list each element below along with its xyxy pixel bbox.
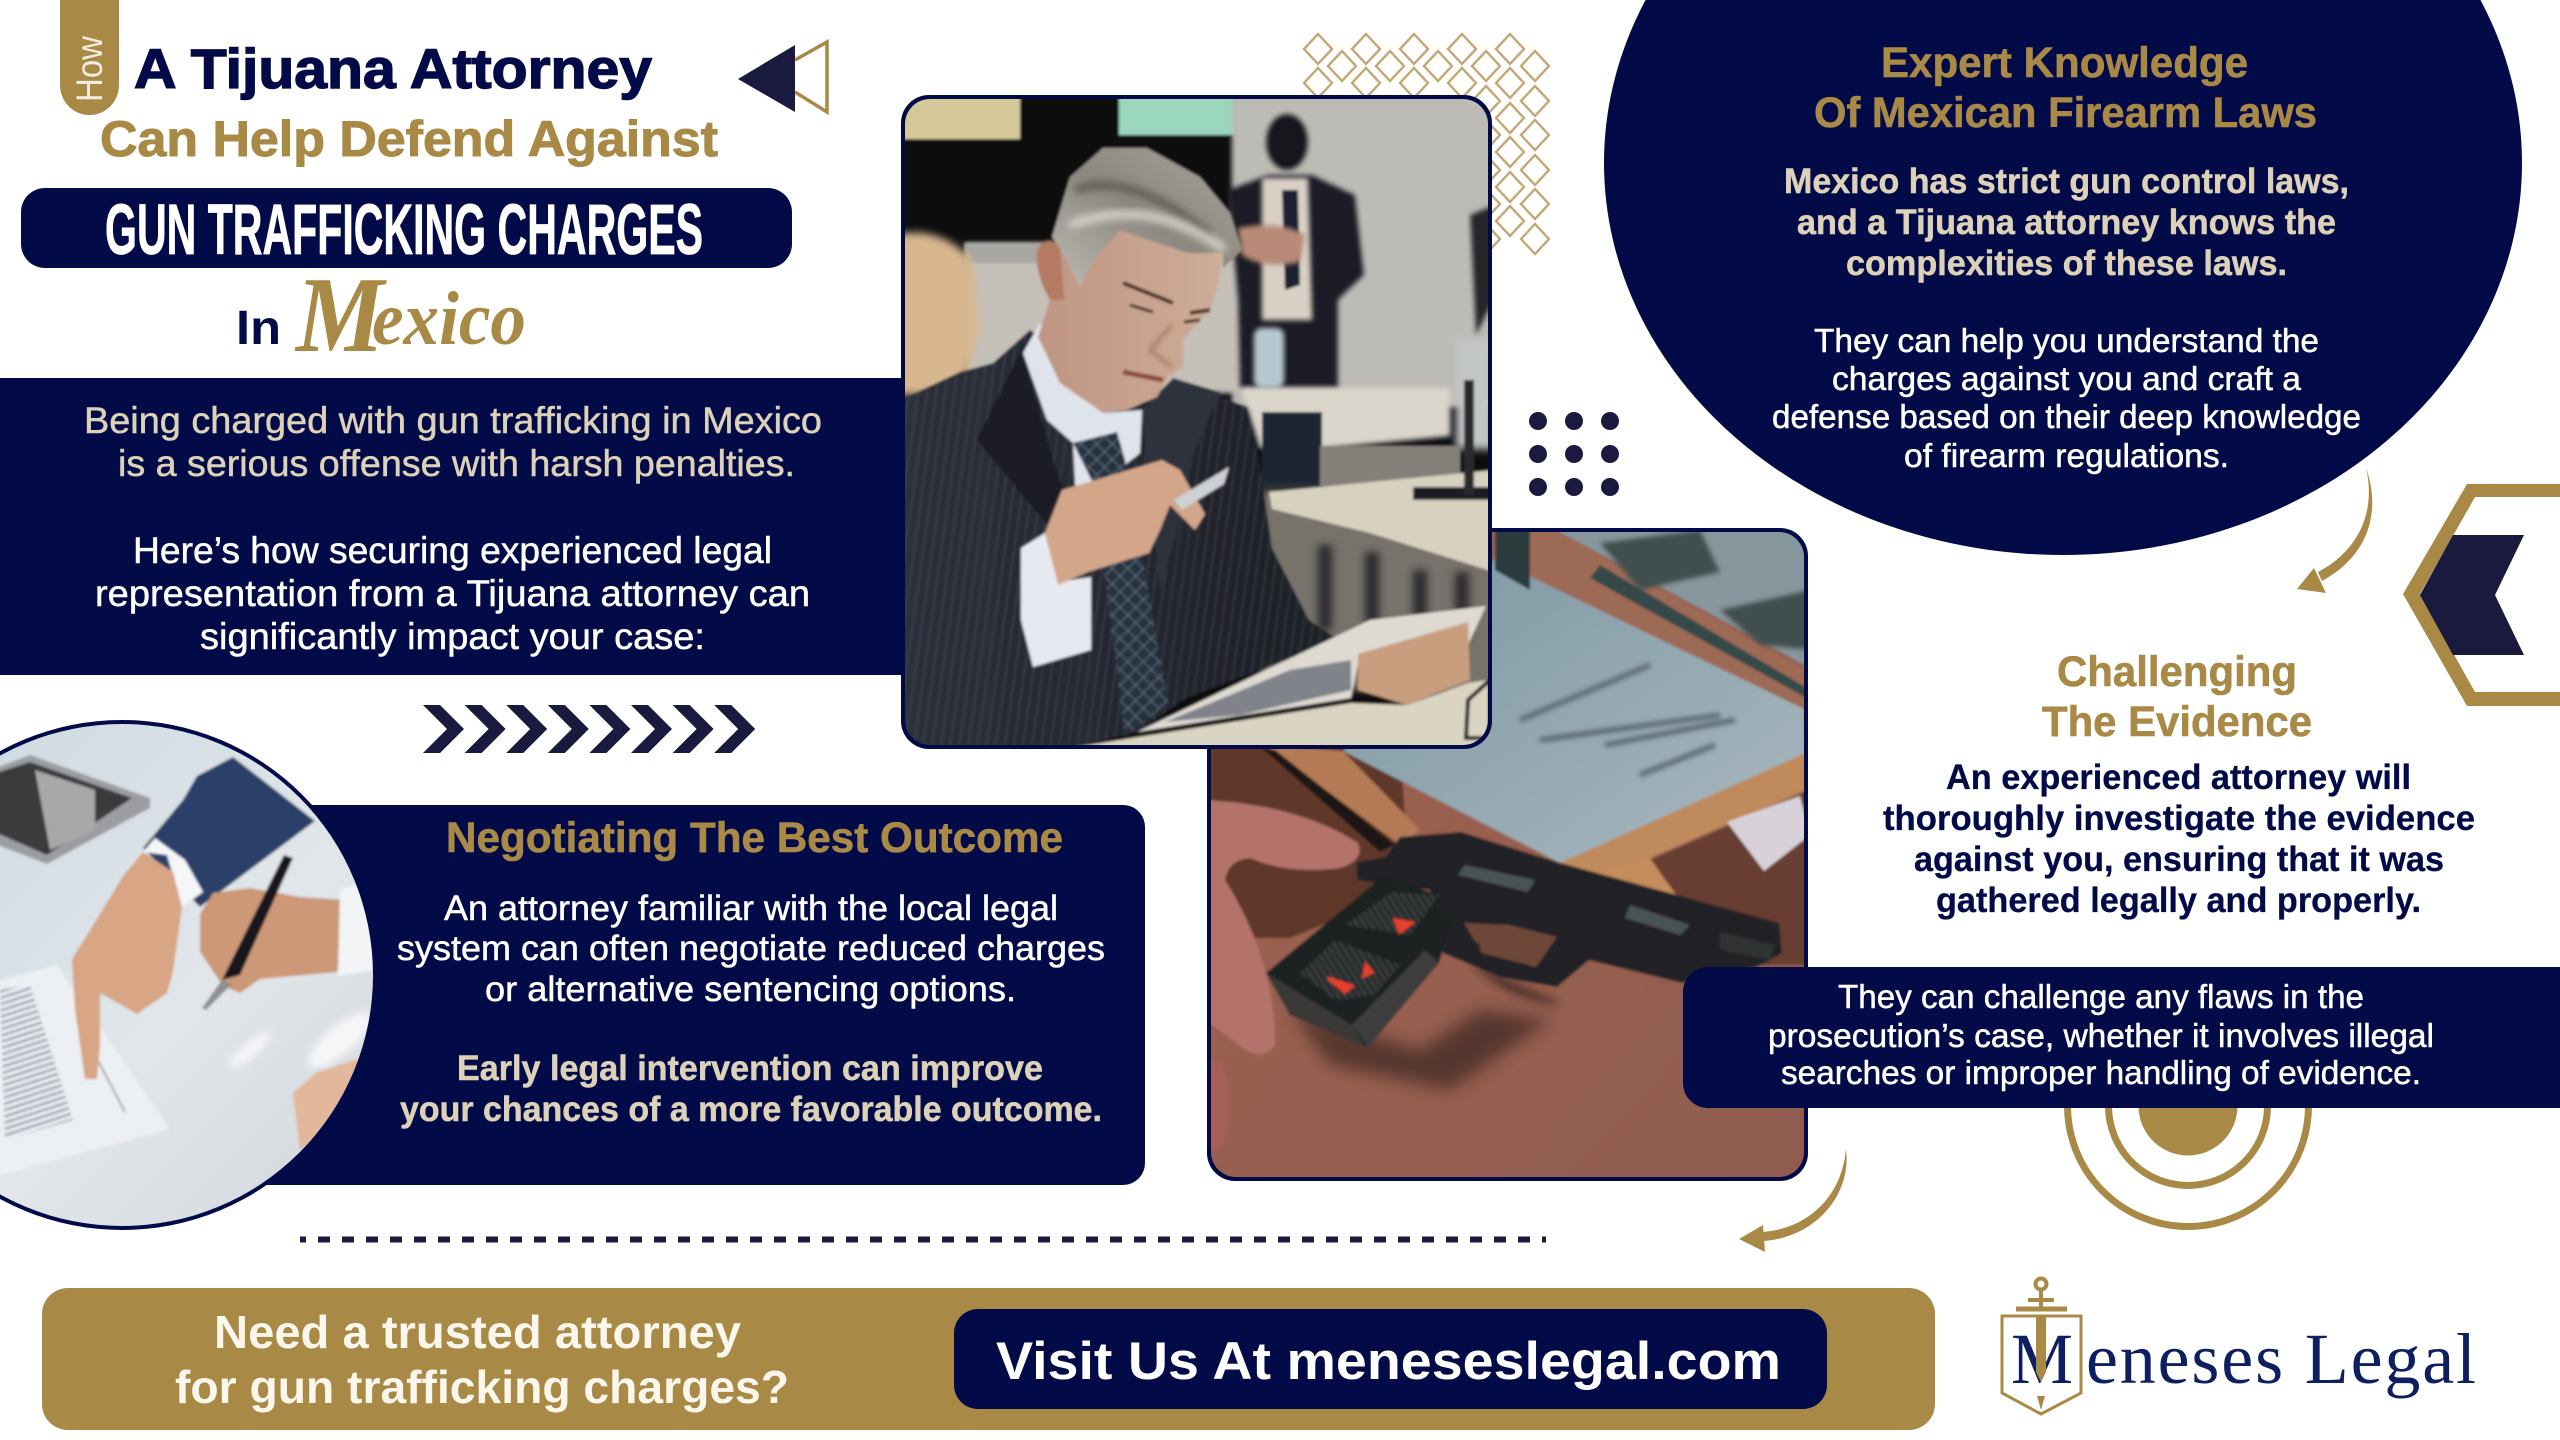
text block: investigating evidence <box>1883 758 2475 920</box>
photo: handgun on legal documents <box>1202 525 1815 1185</box>
banner: gun trafficking charges <box>21 188 792 270</box>
icon: how tab: How <box>69 36 110 102</box>
text block: need attorney: Need a trusted attorney <box>214 1306 741 1358</box>
text block: offense warning: Being charged with gun trafficking in Mexico <box>84 400 822 441</box>
text block: investigating evidence: An experienced attorney will <box>1946 758 2411 797</box>
photo: attorney reading documents <box>895 95 1500 755</box>
dotted divider <box>300 1236 1546 1242</box>
icon: how tab <box>60 0 119 115</box>
heading: challenging the evidence: Challenging <box>2057 648 2297 696</box>
diamond pattern <box>1304 34 1549 254</box>
text block: gun law summary: Mexico has strict gun control laws, <box>1784 162 2349 201</box>
text block: reduced charges: system can often negotiate reduced charges <box>397 929 1105 968</box>
text block: defense explanation: of firearm regulations. <box>1904 437 2229 474</box>
panel: challenge flaws box <box>1683 967 2560 1108</box>
icon: concentric half circles <box>2068 986 2308 1226</box>
text block: need attorney: for gun trafficking charges? <box>175 1361 789 1413</box>
text block: defense explanation: charges against you and craft a <box>1832 360 2302 397</box>
button: visit website: Visit Us At meneseslegal.com <box>996 1332 1781 1391</box>
heading: expert knowledge: Of Mexican Firearm Laws <box>1814 89 2317 137</box>
heading: expert knowledge: Expert Knowledge <box>1881 39 2248 87</box>
title: in mexico: exico <box>372 277 526 361</box>
panel: challenge flaws box: They can challenge any flaws in the <box>1838 978 2364 1015</box>
icon: double triangle <box>738 42 827 112</box>
text block: early intervention: your chances of a more favorable outcome. <box>400 1090 1102 1129</box>
heading: expert knowledge <box>1814 39 2317 137</box>
arrow: curved to call to action <box>1739 1149 1847 1252</box>
text block: representation intro: representation from a Tijuana attorney can <box>95 573 810 614</box>
heading: negotiating: Negotiating The Best Outcome <box>446 814 1063 862</box>
text block: defense explanation <box>1772 322 2361 474</box>
text block: gun law summary: complexities of these laws. <box>1846 244 2287 283</box>
panel: challenge flaws box: searches or improper handling of evidence. <box>1781 1054 2421 1091</box>
text block: investigating evidence: against you, ensuring that it was <box>1914 840 2444 879</box>
title: line one: A Tijuana Attorney <box>134 37 652 100</box>
banner: gun trafficking charges: GUN TRAFFICKING CHARGES <box>105 191 703 270</box>
text block: representation intro: Here’s how securing experienced legal <box>133 530 772 571</box>
title: in mexico: In <box>236 302 281 355</box>
text block: reduced charges <box>397 889 1105 1009</box>
text block: representation intro <box>95 530 810 657</box>
icon: dot grid <box>1529 412 1619 496</box>
panel: expert knowledge circle <box>1604 0 2522 555</box>
title: in mexico: M <box>294 256 388 375</box>
text block: investigating evidence: thoroughly investigate the evidence <box>1883 799 2475 838</box>
text block: early intervention: Early legal intervention can improve <box>457 1049 1043 1088</box>
panel: negotiating the best outcome <box>200 805 1145 1185</box>
panel: challenge flaws box: prosecution’s case, whether it involves illegal <box>1768 1017 2434 1054</box>
text block: defense explanation: They can help you understand the <box>1814 322 2319 359</box>
panel: introduction band <box>0 378 960 675</box>
text block: representation intro: significantly impact your case: <box>200 616 705 657</box>
text block: defense explanation: defense based on their deep knowledge <box>1772 398 2361 435</box>
call to action bar <box>42 1288 1935 1430</box>
icon: chevron row <box>423 705 755 753</box>
text block: need attorney <box>175 1306 789 1413</box>
heading: challenging the evidence <box>2042 648 2312 746</box>
button: visit website <box>954 1309 1827 1409</box>
title: line two: Can Help Defend Against <box>100 111 718 167</box>
text block: gun law summary: and a Tijuana attorney knows the <box>1797 203 2336 242</box>
heading: challenging the evidence: The Evidence <box>2042 698 2312 746</box>
logo: meneses legal: M <box>2011 1319 2073 1399</box>
arrow: curved to challenging section <box>2297 468 2372 593</box>
text block: investigating evidence: gathered legally and properly. <box>1936 881 2421 920</box>
photo: hands reviewing contract <box>0 715 380 1235</box>
icon: hexagon chevron <box>2403 484 2560 706</box>
text block: reduced charges: An attorney familiar with the local legal <box>444 889 1058 928</box>
logo: meneses legal: eneses Legal <box>2086 1319 2476 1399</box>
text block: offense warning: is a serious offense with harsh penalties. <box>118 443 795 484</box>
title: in mexico <box>236 256 526 375</box>
logo: meneses legal <box>2002 1278 2476 1414</box>
text block: early intervention <box>400 1049 1102 1129</box>
text block: reduced charges: or alternative sentencing options. <box>485 970 1016 1009</box>
text block: gun law summary <box>1784 162 2349 283</box>
text block: offense warning <box>84 400 822 484</box>
